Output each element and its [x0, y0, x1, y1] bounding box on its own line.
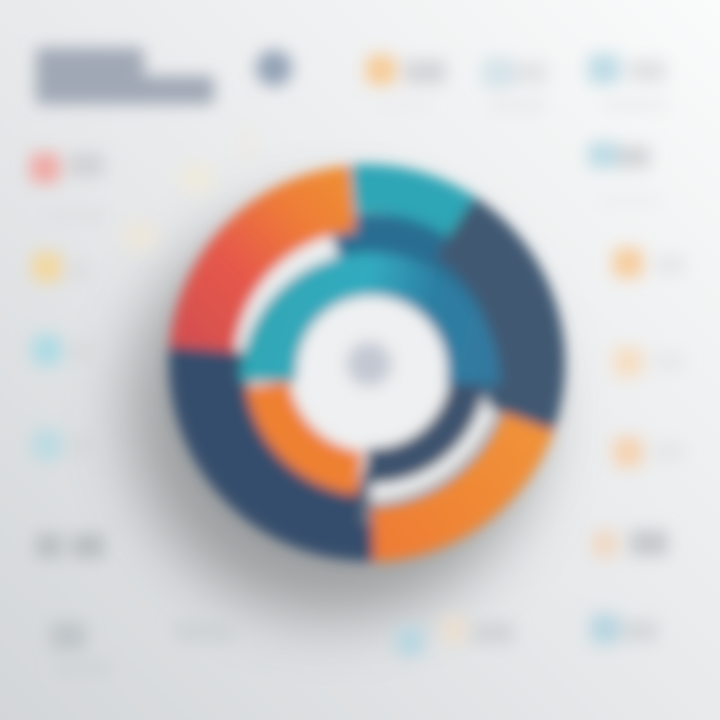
legend item: navy badge	[256, 50, 292, 86]
legend item: grey pair	[36, 534, 104, 558]
legend item: peach and grey	[592, 530, 668, 558]
inner segment: orange	[268, 384, 360, 473]
left legend column	[30, 153, 110, 674]
outer segment: teal	[352, 188, 462, 217]
legend item: bottom grey	[50, 622, 110, 674]
inner segment: navy	[366, 362, 468, 466]
legend item: blue	[588, 54, 667, 110]
legend item: yellow	[32, 252, 90, 282]
inner backing disc	[231, 229, 503, 501]
junction at bottom centre	[366, 470, 367, 525]
legend item: pale orange	[613, 347, 684, 377]
legend item: pale blue	[482, 58, 547, 112]
faint accent dots	[125, 130, 254, 248]
centre icon	[347, 342, 391, 386]
legend item: orange	[366, 55, 446, 110]
legend item: peach and grey	[443, 616, 514, 644]
outer segment: red to orange	[203, 199, 353, 349]
legend item: peach	[613, 437, 684, 467]
blue backing wedge joining top and right	[335, 240, 502, 400]
legend item: teal	[32, 335, 98, 365]
top legend row	[256, 50, 667, 112]
heading	[36, 48, 214, 104]
outer segment: navy left	[208, 349, 372, 522]
bottom legend row	[175, 616, 514, 656]
donut chart	[203, 188, 529, 535]
drop shadow under donut	[130, 207, 540, 617]
legend item: blue and grey	[588, 142, 660, 207]
legend item: orange	[613, 248, 685, 278]
legend item: blue	[396, 626, 424, 656]
inner segment: teal to blue	[268, 281, 472, 384]
centre disc	[297, 296, 447, 446]
outer segment: navy right	[455, 227, 529, 418]
outer segment: orange	[373, 422, 529, 535]
legend item: faint grey	[175, 620, 235, 642]
legend item: bottom blue	[590, 614, 658, 644]
legend item: pale teal	[32, 430, 98, 460]
right legend column	[588, 142, 685, 644]
legend item: red	[30, 153, 105, 222]
